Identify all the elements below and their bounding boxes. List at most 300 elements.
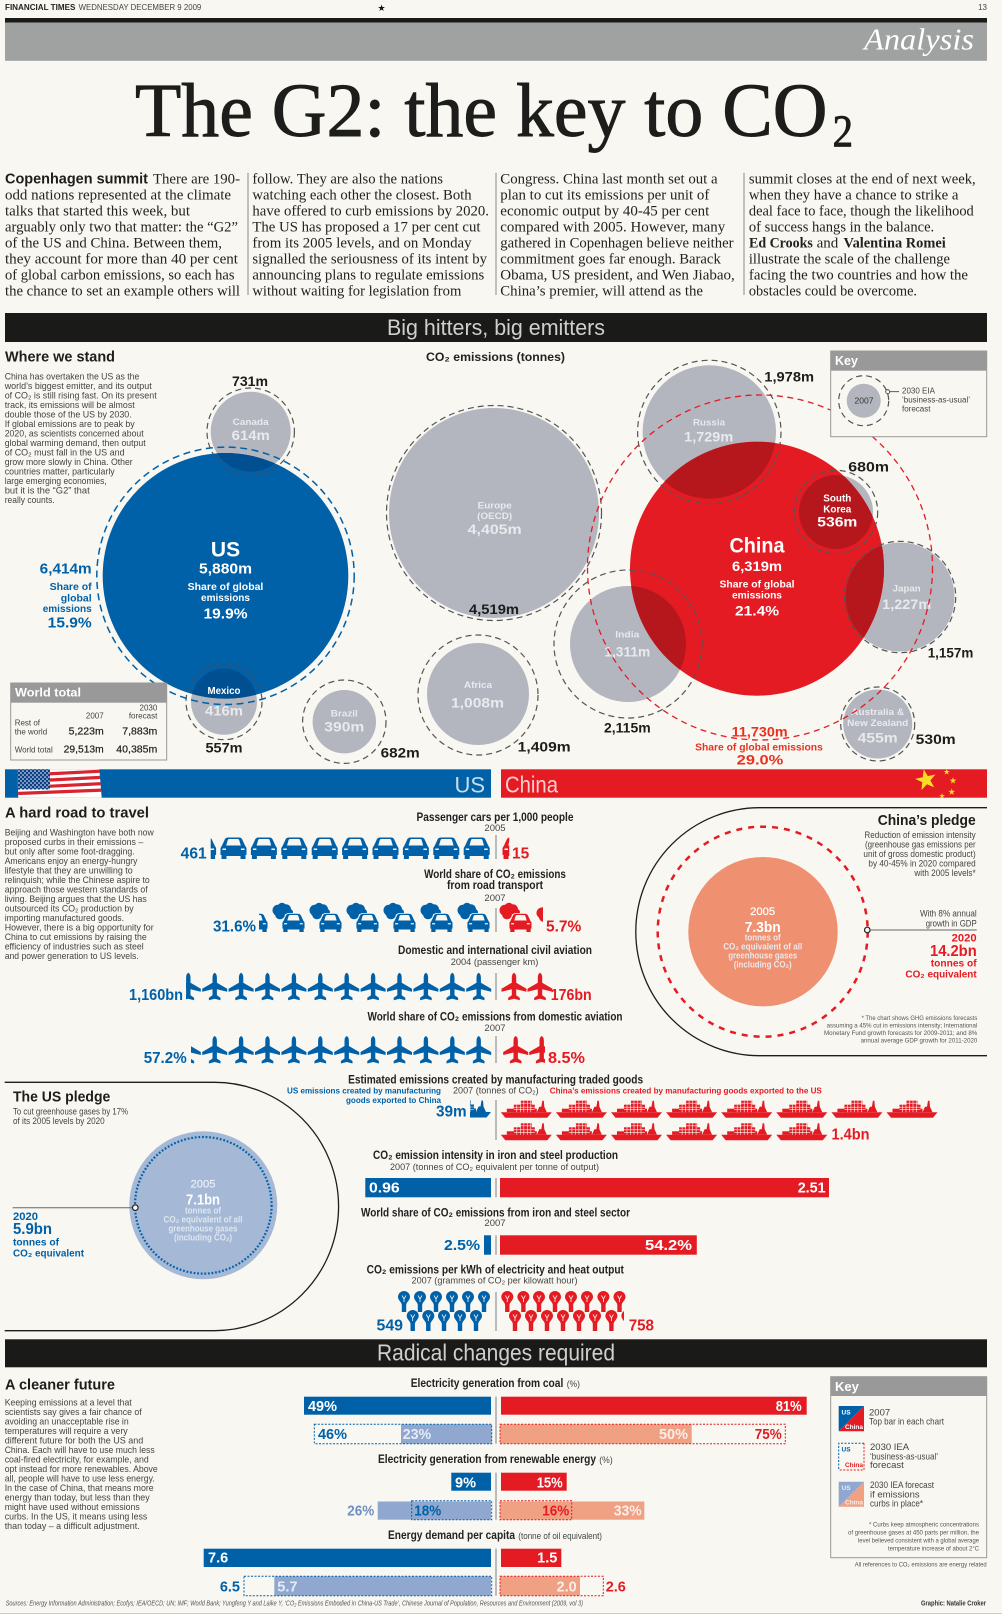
text block: pledge description: (greenhouse gas emissions per — [865, 840, 976, 850]
callout: 2020 China emissions: tonnes of — [931, 958, 977, 970]
table: world total: 2007 — [86, 712, 104, 721]
bar chart: energy demand per capita: (tonne of oil equivalent) — [518, 1531, 602, 1542]
bubble: Japan: 1,227m — [882, 596, 931, 612]
circle: China 2005 emissions and 2020 ring: (including CO₂) — [734, 960, 792, 970]
bubble: Brazil: 682m — [381, 744, 420, 760]
chart: domestic aviation share: 57.2% — [144, 1050, 187, 1067]
text block: cleaner future: than today – a difficult adjustment. — [5, 1521, 140, 1532]
icon rows: US bulbs — [398, 1291, 490, 1331]
Mexico labels: Mexico — [208, 686, 240, 697]
bubble chart: other regions — [386, 406, 602, 755]
circle: US 2005 emissions and 2020 ring: 7.1bn — [186, 1191, 220, 1208]
US forecast labels: Share of — [50, 581, 92, 593]
circle: China 2005 emissions and 2020 ring: tonnes of — [745, 933, 782, 943]
text block: cleaner future: China. Each will have to use much less — [5, 1445, 155, 1456]
text block: pledge description — [863, 830, 976, 879]
circle: China 2005 emissions and 2020 ring: CO₂ equivalent of all — [723, 942, 802, 952]
callout: 2020 US emissions: CO₂ equivalent — [13, 1247, 84, 1259]
callout: 2020 US emissions: 2020 — [13, 1211, 38, 1223]
bar chart: electricity from renewables: 18% — [414, 1504, 441, 1520]
bar chart: emission intensity in iron and steel: 2007 (tonnes of CO₂ equivalent per tonne of output) — [390, 1162, 599, 1173]
US forecast labels — [40, 561, 92, 631]
text block: cleaner future: temperatures will require a very — [5, 1426, 128, 1437]
bar chart: energy demand per capita: 6.5 — [220, 1579, 240, 1595]
footnote: chart assumptions: Monetary Fund growth forecasts for 2009-2011; and 8% — [824, 1030, 978, 1037]
bubble: India: India — [615, 629, 640, 640]
heading: The US pledge: The US pledge — [13, 1089, 110, 1106]
text block: hard road: However, there is a big opportunity for — [5, 923, 154, 934]
swatch: business-as-usual forecast: 2030 IEA — [870, 1442, 910, 1453]
chart: traded goods emissions: 1.4bn — [832, 1126, 870, 1143]
bubble: Brazil — [303, 680, 420, 763]
text block: pledge description: unit of gross domestic product) — [863, 849, 976, 860]
chart: traded goods emissions: China’s emissions created by manufacturing goods exported to the US — [550, 1086, 822, 1096]
table: world total: 2030 — [140, 704, 158, 713]
bubble: Europe: 4,405m — [468, 521, 522, 537]
intro column 1: they account for more than 40 per cent — [5, 251, 239, 267]
key: bubble chart: 2030 EIA — [902, 386, 936, 396]
chart: CO2 per kWh: CO₂ emissions per kWh of electricity and heat output — [367, 1263, 624, 1277]
circle: US 2005 emissions and 2020 ring — [129, 1131, 277, 1279]
chart: passenger cars: 461 — [181, 846, 207, 863]
text block: US pledge description: To cut greenhouse gases by 17% — [13, 1107, 128, 1118]
bubble: Australia and New Zealand: 530m — [916, 731, 956, 747]
text block: cleaner future: avoiding an unacceptable rise in — [5, 1417, 129, 1428]
bubble chart: China and neighbours — [554, 360, 973, 768]
chart: road transport share: 31.6% — [213, 919, 256, 936]
circle: China 2005 emissions and 2020 ring: 7.3bn — [745, 919, 781, 936]
bar chart: electricity from coal: (%) — [567, 1379, 580, 1390]
intro column 3: plan to cut its emissions per unit of — [500, 187, 709, 203]
bubble: Russia: Russia — [693, 418, 726, 429]
intro column 3: economic output by 40-45 per cent — [500, 203, 710, 219]
circle: US 2005 emissions and 2020 ring: CO₂ equivalent of all — [164, 1215, 242, 1225]
table: world total: 29,513m — [64, 745, 104, 756]
icon rows: China ships — [501, 1101, 938, 1140]
bar chart: world share iron and steel: 54.2% — [645, 1237, 692, 1254]
text block: where we stand: China has overtaken the US as the — [5, 371, 139, 382]
bar chart: energy demand per capita: 1.5 — [537, 1551, 557, 1567]
text block: where we stand: global warming demand, then output — [5, 438, 146, 449]
text block: pledge description: with 2005 levels* — [914, 868, 976, 879]
table: world total: the world — [15, 728, 47, 737]
intro column 4: when they have a chance to strike a — [749, 187, 959, 203]
key: bubble chart: ‘business-as-usual’ — [902, 396, 970, 404]
bubble: Europe — [386, 406, 602, 620]
bar chart: electricity from renewables: 9% — [455, 1475, 476, 1491]
callout: 2020 China emissions: 14.2bn — [930, 943, 977, 960]
table: world total: World total — [15, 686, 81, 700]
bubble: Australia and New Zealand: 455m — [858, 730, 898, 746]
bubble: China: emissions — [732, 590, 782, 602]
table: world total: 5,223m — [69, 726, 104, 737]
China 2030 forecast ring and labels — [588, 395, 932, 768]
intro column 3: China’s premier, will attend as the — [500, 283, 703, 299]
chart: road transport share: 2007 — [484, 893, 506, 904]
swatch: business-as-usual forecast: ‘business-as-usual’ — [870, 1451, 938, 1462]
chart: passenger cars: 2005 — [484, 823, 506, 834]
callout: 2020 China emissions: 2020 — [952, 933, 977, 945]
heading: China's pledge: China’s pledge — [878, 812, 976, 829]
bubble: Africa — [418, 635, 571, 755]
text block: hard road: but only after some foot-dragging. — [5, 847, 135, 858]
newspaper folio line — [5, 3, 988, 13]
intro column 1: talks that started this week, but — [5, 203, 191, 219]
bubble: China: 21.4% — [735, 602, 780, 618]
bubble: China: 6,319m — [732, 558, 782, 574]
chart: road transport share: World share of CO₂ emissions — [424, 867, 566, 881]
text block: hard road: approach those western standards of — [5, 885, 148, 896]
text block: where we stand: countries matter, particularly — [5, 466, 115, 477]
bubble: Brazil: 390m — [324, 719, 364, 735]
intro column 1 — [5, 171, 240, 299]
text block: cleaner future: scientists say gives a fair chance of — [5, 1407, 142, 1418]
panel: The US pledge — [5, 1082, 339, 1331]
circle: US 2005 emissions and 2020 ring: 2005 — [190, 1179, 216, 1191]
bar chart: electricity from coal: Electricity generation from coal — [411, 1376, 563, 1390]
bar chart: electricity from coal — [304, 1376, 807, 1444]
intro column 1: of global carbon emissions, so each has — [5, 267, 235, 283]
chart: traded goods emissions: US emissions created by manufacturing — [287, 1086, 441, 1096]
icon row: US planes — [176, 1036, 491, 1064]
key: radical changes bars: Key — [835, 1379, 860, 1394]
bubble: Russia — [638, 360, 814, 504]
heading: A hard road to travel: A hard road to travel — [5, 805, 149, 822]
swatch: forecast with curbs — [839, 1480, 934, 1509]
text block: cleaner future: energy than today, but less than they — [5, 1493, 150, 1504]
bar chart: electricity from renewables — [347, 1452, 644, 1520]
footnote: chart assumptions: assuming a 45% cut in emissions intensity; International — [827, 1022, 978, 1030]
intro column 1: arguably only two that matter: the “G2” — [5, 219, 238, 235]
bubble: Japan: Japan — [893, 584, 921, 595]
circle: US 2005 emissions and 2020 ring: (including CO₂) — [174, 1232, 232, 1242]
swatch: business-as-usual forecast: forecast — [870, 1460, 904, 1471]
bar chart: electricity from renewables: 16% — [542, 1504, 569, 1520]
text block: cleaner future: coal-fired electricity, for example, and — [5, 1455, 149, 1466]
bubble: South Korea: Korea — [823, 504, 852, 515]
chart heading: CO2 emissions: CO₂ emissions (tonnes) — [426, 350, 565, 364]
text block: hard road: lifestyle that they are unwilling to — [5, 866, 133, 877]
bubble: Canada: Canada — [233, 417, 269, 428]
chart: domestic aviation share: 8.5% — [548, 1050, 585, 1067]
intro column 2: without waiting for legislation from — [252, 283, 462, 299]
text block: where we stand: large emerging economies, — [5, 476, 107, 487]
heading: Where we stand: Where we stand — [5, 350, 115, 366]
chart: domestic aviation share: 2007 — [484, 1023, 506, 1034]
intro column 4: facing the two countries and how the — [749, 267, 968, 283]
callout: 2020 China emissions: growth in GDP — [926, 918, 977, 929]
text block: hard road: living. Beijing argues that the US has — [5, 894, 147, 905]
US forecast labels: global — [61, 592, 92, 604]
chart: traded goods emissions: 39m — [436, 1104, 467, 1121]
intro column 3 — [500, 171, 735, 299]
text block: US pledge description: of its 2005 levels by 2020 — [13, 1116, 105, 1127]
circle: US 2005 emissions and 2020 ring: greenhouse gases — [168, 1224, 238, 1234]
text block: cleaner future: different future for both the US and — [5, 1436, 143, 1447]
bar chart: energy demand per capita: 7.6 — [208, 1551, 228, 1567]
chart: traded goods emissions: goods exported to China — [346, 1095, 441, 1105]
China 2030 forecast ring and labels: Share of global emissions — [695, 742, 823, 754]
swatch: business-as-usual forecast: US — [842, 1446, 851, 1454]
key: radical changes bars — [831, 1377, 987, 1558]
intro column 4: Ed Crooks — [749, 235, 813, 251]
icon row: US planes — [176, 973, 491, 1000]
text block: where we stand: track, its emissions will be almost — [5, 400, 135, 411]
chart: traded goods emissions — [287, 1072, 938, 1143]
icon row: China cars with clouds — [500, 902, 543, 932]
callout: 2020 US emissions: 5.9bn — [13, 1221, 52, 1238]
icon row: US cars with clouds — [245, 903, 490, 932]
bar chart: electricity from coal: 49% — [308, 1399, 337, 1415]
chart: traded goods emissions: Estimated emissions created by manufacturing traded goods — [348, 1072, 643, 1086]
text block: hard road: efficiency of industries such as steel — [5, 942, 144, 953]
bubble: Europe: Europe — [478, 500, 512, 511]
bubble: Europe: (OECD) — [477, 511, 512, 522]
swatch: forecast with curbs: China — [845, 1500, 863, 1506]
icon row: China planes — [503, 1036, 545, 1064]
footnote: chart assumptions: annual average GDP growth for 2011-2020 — [861, 1038, 978, 1044]
intro column 2 — [252, 171, 489, 299]
graphic credit: Graphic: Natalie Croker — [921, 1600, 986, 1608]
swatch: 2007: China — [845, 1424, 863, 1431]
swatch: 2007: 2007 — [869, 1408, 890, 1418]
bar chart: energy demand per capita: 2.6 — [606, 1579, 626, 1595]
text block: cleaner future: might have used without emissions — [5, 1502, 140, 1513]
bubble: Russia: 1,978m — [764, 369, 814, 385]
table: world total: Rest of — [15, 718, 41, 727]
Analysis banner — [5, 18, 987, 61]
text block: where we stand: double those of the US by 2030. — [5, 409, 132, 420]
text block: cleaner future: Keeping emissions at a level that — [5, 1398, 132, 1409]
chart: civil aviation: Domestic and international civil aviation — [398, 943, 592, 957]
bubble: US: 5,880m — [199, 561, 252, 577]
footnote: curbs: level believed consistent with a global average — [858, 1538, 979, 1544]
text block: pledge description: Reduction of emission intensity — [864, 830, 976, 841]
bar chart: energy demand per capita: 2.0 — [557, 1579, 577, 1595]
swatch: forecast with curbs: 2030 IEA forecast — [870, 1480, 934, 1491]
bubble: Europe: 4,519m — [469, 601, 519, 617]
key: bubble chart: 2007 — [855, 396, 874, 406]
bar chart: world share iron and steel: World share of CO₂ emissions from iron and steel sector — [361, 1206, 630, 1220]
intro column 4: obstacles could be overcome. — [749, 283, 917, 299]
intro column 3: Congress. China last month set out a — [500, 171, 718, 187]
Mexico labels: 557m — [206, 740, 242, 756]
chart: traded goods emissions: 2007 (tonnes of CO₂) — [453, 1086, 539, 1096]
callout: 2020 US emissions: tonnes of — [13, 1236, 59, 1248]
icon rows: China bulbs — [501, 1291, 633, 1331]
text block: where we stand: grow more slowly in China. Other — [5, 457, 133, 468]
bubble: South Korea: 536m — [817, 514, 857, 530]
intro column 2: follow. They are also the nations — [252, 171, 443, 187]
text block: hard road: importing manufactured goods. — [5, 913, 124, 924]
bubble: Australia and New Zealand: Australia & — [851, 707, 904, 718]
bubble: South Korea: 680m — [848, 459, 889, 475]
icon row: US cars — [190, 838, 490, 859]
callout: 2020 China emissions: CO₂ equivalent — [905, 969, 977, 981]
intro column 2: signalled the seriousness of its intent by — [252, 251, 487, 267]
text block: where we stand: but it is the “G2” that — [5, 485, 90, 496]
icon: China flag stars — [913, 767, 956, 798]
bar chart: electricity from coal: 23% — [403, 1427, 431, 1443]
chart: CO2 per kWh: 549 — [376, 1318, 403, 1335]
text block: where we stand — [4, 371, 157, 506]
bubble: Canada — [207, 373, 294, 475]
intro column 3: compared with 2005. However, many — [500, 219, 726, 235]
icon: US flag — [15, 769, 105, 798]
US forecast labels: emissions — [43, 603, 92, 615]
text block: cleaner future: curbs. In the US, it means using less — [5, 1512, 148, 1523]
bubble: Canada: 731m — [232, 373, 268, 389]
intro column 3: gathered in Copenhagen believe neither — [500, 235, 734, 251]
bubble: India: 1,311m — [604, 644, 650, 660]
bar chart: electricity from renewables: 15% — [537, 1475, 563, 1491]
China band with flag: China — [505, 772, 558, 798]
bar chart: electricity from renewables: 33% — [614, 1504, 642, 1520]
footnote: curbs: * Curbs keep atmospheric concentrations — [869, 1522, 980, 1528]
text block: hard road: Beijing and Washington have both now — [5, 828, 154, 839]
bubble: Brazil: Brazil — [331, 709, 358, 720]
bubble: Canada: 614m — [232, 427, 270, 443]
circle: China 2005 emissions and 2020 ring: 2005 — [750, 906, 775, 918]
panel: China's pledge — [636, 808, 987, 1056]
US forecast labels: 6,414m — [40, 561, 92, 577]
callout: 2020 China emissions — [864, 909, 977, 981]
bubble: Australia and New Zealand — [841, 687, 956, 761]
text block: hard road: relinquish; while the Chinese aspire to — [5, 875, 150, 886]
bubble: South Korea: South — [823, 493, 851, 504]
intro column 4: and — [817, 235, 839, 251]
text block: where we stand: If global emissions are to peak by — [5, 419, 135, 430]
swatch: forecast with curbs: US — [842, 1485, 851, 1492]
intro column 4: illustrate the scale of the challenge — [749, 251, 950, 267]
chart: road transport share — [213, 867, 582, 936]
text block: where we stand: world’s biggest emitter, and its output — [4, 381, 152, 392]
bar chart: electricity from coal: 50% — [659, 1427, 688, 1443]
bubble: South Korea — [794, 459, 889, 554]
table: world total — [11, 683, 167, 760]
bubble: Africa: 1,409m — [518, 739, 571, 755]
US forecast labels: 15.9% — [48, 615, 92, 631]
text block: hard road: Americans enjoy an energy-hungry — [5, 856, 138, 867]
table: world total: World total — [15, 746, 53, 755]
intro column 2: from its 2005 levels, and on Monday — [252, 235, 472, 251]
newspaper folio line: ★ — [377, 3, 386, 13]
circle: China 2005 emissions and 2020 ring: greenhouse gases — [728, 951, 797, 961]
bubble: China: Share of global — [720, 579, 795, 591]
bar chart: energy demand per capita: 5.7 — [277, 1579, 297, 1595]
chart: CO2 per kWh: 2007 (grammes of CO₂ per kilowatt hour) — [412, 1276, 578, 1286]
chart: passenger cars: 15 — [512, 846, 530, 863]
bar chart: emission intensity in iron and steel: 0.96 — [369, 1180, 400, 1196]
text block: where we stand: really counts. — [5, 495, 55, 506]
intro column 1: of the US and China. Between them, — [5, 235, 222, 251]
footnote: curbs: of greenhouse gases at 450 parts per million, the — [848, 1530, 979, 1536]
intro column 4 — [749, 171, 976, 299]
intro column 2: watching each other the closest. Both — [252, 187, 472, 203]
bubble: US: Share of global — [188, 581, 263, 593]
intro column 3: Obama, US president, and Wen Jiabao, — [500, 267, 735, 283]
text block: cleaner future: opt instead for more renewables. Above — [5, 1464, 158, 1475]
intro column 1: There are 190- — [153, 171, 240, 187]
bubble: Japan — [844, 541, 973, 661]
bubble: US: US — [211, 539, 240, 562]
callout: 2020 US emissions — [13, 1205, 138, 1259]
chart: passenger cars: Passenger cars per 1,000 people — [416, 810, 574, 824]
icon: US partial ship — [470, 1100, 491, 1118]
bar chart: emission intensity in iron and steel: CO₂ emission intensity in iron and steel production — [373, 1148, 618, 1162]
chart: CO2 per kWh — [367, 1263, 654, 1335]
key: bubble chart: Key — [835, 354, 858, 368]
heading: A cleaner future: A cleaner future — [5, 1376, 115, 1393]
chart: road transport share: 5.7% — [546, 919, 582, 936]
text block: hard road: outsourced its CO₂ production by — [5, 904, 134, 915]
newspaper folio line: WEDNESDAY DECEMBER 9 2009 — [79, 3, 202, 12]
text block: cleaner future: In the case of China, that means more — [5, 1483, 154, 1494]
footnote: curbs: temperature increase of about 2°C — [888, 1544, 979, 1552]
bubble: Japan: 1,157m — [928, 645, 973, 661]
bubble: India — [554, 570, 702, 736]
circle: US 2005 emissions and 2020 ring: tonnes of — [185, 1205, 222, 1215]
chart: civil aviation: 1,160bn — [129, 987, 183, 1004]
bar chart: emission intensity in iron and steel: 2.51 — [798, 1180, 826, 1196]
text block: hard road: and power generation to US levels. — [5, 951, 139, 962]
swatch: forecast with curbs: if emissions — [870, 1489, 920, 1500]
text block: US pledge description — [13, 1107, 128, 1127]
bubble: China: China — [730, 535, 785, 558]
chart: domestic aviation share — [144, 1010, 622, 1067]
text block: cleaner future — [5, 1398, 158, 1532]
intro column 2: The US has proposed a 17 per cent cut — [252, 219, 481, 235]
bar chart: energy demand per capita — [204, 1528, 626, 1596]
intro column 4: Valentina Romei — [844, 235, 946, 251]
key: bubble chart: forecast — [902, 404, 931, 414]
intro column 2: have offered to curb emissions by 2020. — [252, 203, 489, 219]
text block: where we stand: of CO₂ is still rising fast. On its present — [5, 390, 157, 401]
text block: pledge description: by 40-45% in 2020 compared — [868, 858, 976, 870]
table: world total: 7,883m — [122, 726, 157, 737]
bar chart: world share iron and steel: 2007 — [484, 1218, 506, 1229]
swatch: 2007: Top bar in each chart — [869, 1417, 944, 1428]
intro column 4: deal face to face, though the likelihood — [749, 203, 974, 219]
bar chart: emission intensity in iron and steel — [365, 1148, 829, 1197]
text block: where we stand: of CO₂ must fall in the US and — [5, 447, 125, 458]
title: The G2: the key to CO — [135, 69, 828, 153]
swatch: forecast with curbs: curbs in place* — [870, 1498, 923, 1509]
Mexico labels: 416m — [205, 703, 243, 719]
text block: where we stand: 2020, as scientists concerned about — [5, 428, 144, 439]
bar chart: electricity from coal: 46% — [318, 1427, 347, 1443]
bar chart: energy demand per capita: Energy demand per capita — [388, 1528, 515, 1542]
bar chart: world share iron and steel: 2.5% — [444, 1237, 480, 1254]
circle: China 2005 emissions and 2020 ring — [658, 827, 868, 1037]
intro text — [5, 171, 976, 299]
text block: hard road: China to cut emissions by raising the — [5, 932, 147, 943]
intro column 2: announcing plans to regulate emissions — [252, 267, 484, 283]
bubble: Russia: 1,729m — [684, 429, 733, 445]
bubble: Africa: 1,008m — [451, 695, 504, 711]
intro column 3: commitment goes far enough. Barack — [500, 251, 721, 267]
chart: road transport share: from road transport — [447, 878, 543, 892]
bubble chart: US and neighbours — [40, 373, 420, 763]
chart: civil aviation: 176bn — [551, 987, 592, 1004]
sources line: Sources: Energy Information Administration; Ecofys; IEA/OECD; UN; IMF; World Bank; Yungfeng Y and Laike Y, ‘CO₂ Emissions Embodied in China-US Trade’, Chinese Journal of Population, Resources and Environment (2009, vol 3) — [6, 1598, 583, 1608]
table: world total: forecast — [129, 712, 158, 721]
swatch: business-as-usual forecast: China — [845, 1462, 863, 1469]
bubble: US — [96, 446, 355, 706]
Analysis banner: Analysis — [862, 21, 974, 56]
US band with flag: US — [454, 773, 485, 798]
chart: civil aviation — [129, 943, 592, 1004]
